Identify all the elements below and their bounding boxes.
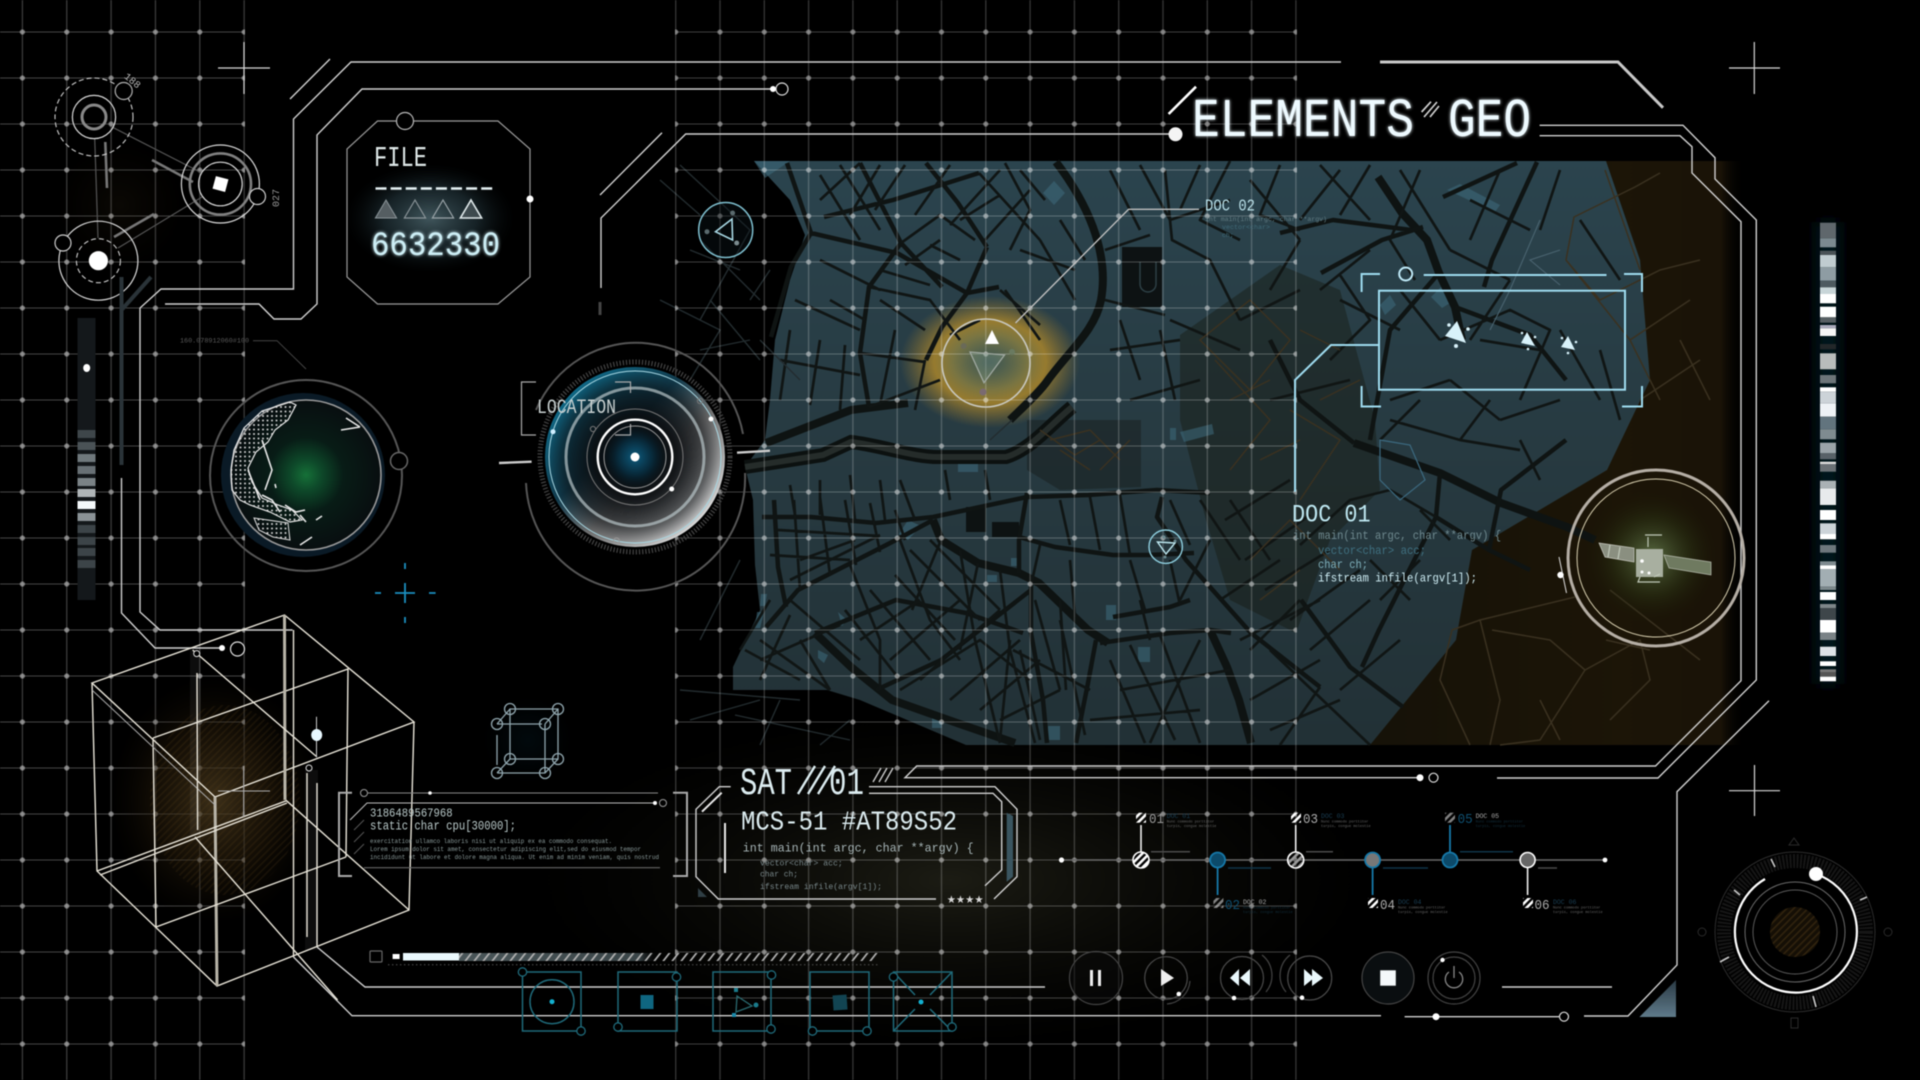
node 06: turpis, congue molestie (1553, 910, 1603, 915)
DOC 02 text: ch; (1222, 232, 1234, 239)
triangle marker 3 (1149, 530, 1182, 563)
icon: satellite (1599, 535, 1711, 582)
button: fast-forward (1280, 955, 1332, 1000)
icon row (518, 968, 956, 1035)
node 02: turpis, congue molestie (1243, 910, 1293, 915)
icon: triangle markers (1445, 321, 1577, 354)
panel: SAT 01: vector<char> acc; (760, 859, 843, 869)
icon: cross frame (889, 972, 956, 1031)
callout line: DOC 02 (1016, 209, 1199, 323)
title (1168, 87, 1531, 153)
small cube icon (478, 692, 578, 788)
panel: SAT 01: char ch; (760, 870, 798, 880)
DOC 02 text: vector<char> (1222, 224, 1270, 231)
DOC 01 text: vector<char> acc; (1318, 544, 1426, 558)
crosshair top-right (1729, 42, 1780, 94)
DOC 01 text: char ch; (1318, 558, 1368, 572)
globe (210, 380, 408, 571)
panel: SAT 01: ifstream infile(argv[1]); (760, 882, 882, 892)
node 05: Nunc commodo porttitor (1476, 820, 1523, 824)
top-left network nodes (50, 72, 283, 300)
node A (55, 72, 142, 156)
node 06: Nunc commodo porttitor (1553, 906, 1600, 910)
code text panel: 3186489567968 (370, 807, 453, 821)
DOC 01 text (1292, 501, 1501, 586)
DOC 02 text: DOC 02 (1205, 198, 1255, 217)
node 02: DOC 02 (1243, 899, 1267, 906)
code text panel: static char cpu[30000]; (370, 818, 516, 834)
satellite scope (1557, 470, 1744, 646)
blue crosshair (375, 563, 436, 623)
node 04: DOC 04 (1398, 899, 1422, 906)
selection box (1295, 268, 1642, 492)
button: play (1145, 957, 1190, 1004)
progress bar (370, 951, 878, 965)
node 02 (1210, 852, 1293, 915)
icon: triangle frame (713, 971, 776, 1033)
right barcode (1816, 222, 1840, 684)
node 03: 03 (1303, 812, 1318, 828)
panel: SAT 01: SAT (740, 763, 792, 806)
node 03: Nunc commodo porttitor (1321, 820, 1368, 824)
big wireframe cube (92, 615, 414, 1000)
node 01: 01 (1149, 812, 1164, 828)
code text panel: exercitation ullamco laboris nisi ut aliquip ex ea commodo consequat. (370, 838, 612, 845)
node 03: turpis, congue molestie (1321, 824, 1371, 829)
code text panel: incididunt ut labore et dolore magna aliqua. Ut enim ad minim veniam, quis nostrud (370, 854, 659, 861)
media controls (1070, 952, 1480, 1004)
panel: SAT 01: int main(int argc, char **argv) { (743, 842, 974, 856)
title: GEO (1448, 90, 1531, 153)
icon: square frame (614, 972, 681, 1031)
node 01 (1133, 812, 1216, 868)
map (660, 161, 1745, 745)
node 02: Nunc commodo porttitor (1243, 906, 1290, 910)
panel: SAT 01: ★★★★ (947, 894, 984, 906)
frame lines (122, 59, 1769, 1021)
crosshair top-left (218, 42, 270, 94)
panel: SAT 01: 01 (829, 763, 864, 806)
node 06: 06 (1534, 898, 1550, 914)
node 02: 02 (1225, 898, 1240, 914)
code text panel: Lorem ipsum dolor sit amet, consectetur adipiscing elit,sed do eiusmod tempor (370, 846, 641, 853)
node 04: Nunc commodo porttitor (1398, 906, 1445, 910)
node 05: DOC 05 (1476, 813, 1499, 820)
yellow node (942, 319, 1030, 407)
node 05 (1442, 812, 1525, 868)
node 04 (1365, 852, 1448, 915)
map highlight glow (900, 296, 1080, 428)
panel: FILE: 6632330 (371, 228, 500, 266)
icon: dim square frame (808, 972, 871, 1035)
bottom-right dial (1698, 838, 1892, 1028)
DOC 01 text: int main(int argc, char **argv) { (1293, 529, 1501, 543)
node A: 188 (121, 72, 142, 92)
timeline (1059, 812, 1607, 915)
panel: FILE: FILE (374, 142, 427, 175)
node 05: 05 (1458, 812, 1473, 828)
panel: FILE (345, 112, 534, 304)
node B: 027 (272, 189, 283, 207)
title: ELEMENTS (1192, 90, 1414, 153)
DOC 01 text: ifstream infile(argv[1]); (1318, 572, 1477, 586)
node 03 (1288, 812, 1371, 868)
node 04: 04 (1380, 898, 1395, 914)
node 01: Nunc commodo porttitor (1167, 820, 1214, 824)
node C (55, 221, 138, 300)
button: rewind (1220, 955, 1272, 1000)
left level bar (78, 318, 96, 600)
crosshair lower-right (1729, 765, 1780, 816)
node 01: DOC 01 (1167, 813, 1190, 820)
DOC 02 text (1205, 198, 1327, 239)
small coordinate label: 160.078912060#100 (180, 338, 249, 344)
node 03: DOC 03 (1321, 813, 1345, 820)
triangle marker (699, 202, 753, 258)
icon: circle frame (518, 968, 585, 1035)
node 05: turpis, congue molestie (1476, 824, 1525, 829)
corner triangle (1639, 980, 1676, 1017)
code text panel (339, 790, 687, 876)
node 01: turpis, congue molestie (1167, 824, 1216, 829)
panel: SAT 01 (696, 763, 1017, 906)
DOC 01 text: DOC 01 (1292, 501, 1371, 530)
node 06 (1520, 852, 1603, 915)
button: power (1428, 952, 1480, 1004)
button: stop (1362, 952, 1414, 1004)
button: pause (1070, 952, 1122, 1004)
node 04: turpis, congue molestie (1398, 910, 1448, 915)
location dial: LOCATION (537, 397, 616, 420)
panel: SAT 01: MCS-51 #AT89S52 (741, 808, 957, 838)
node 06: DOC 06 (1553, 899, 1577, 906)
node B (181, 145, 283, 223)
location dial (499, 343, 770, 591)
DOC 02 text: int main(int argc, char **argv) (1205, 216, 1327, 223)
